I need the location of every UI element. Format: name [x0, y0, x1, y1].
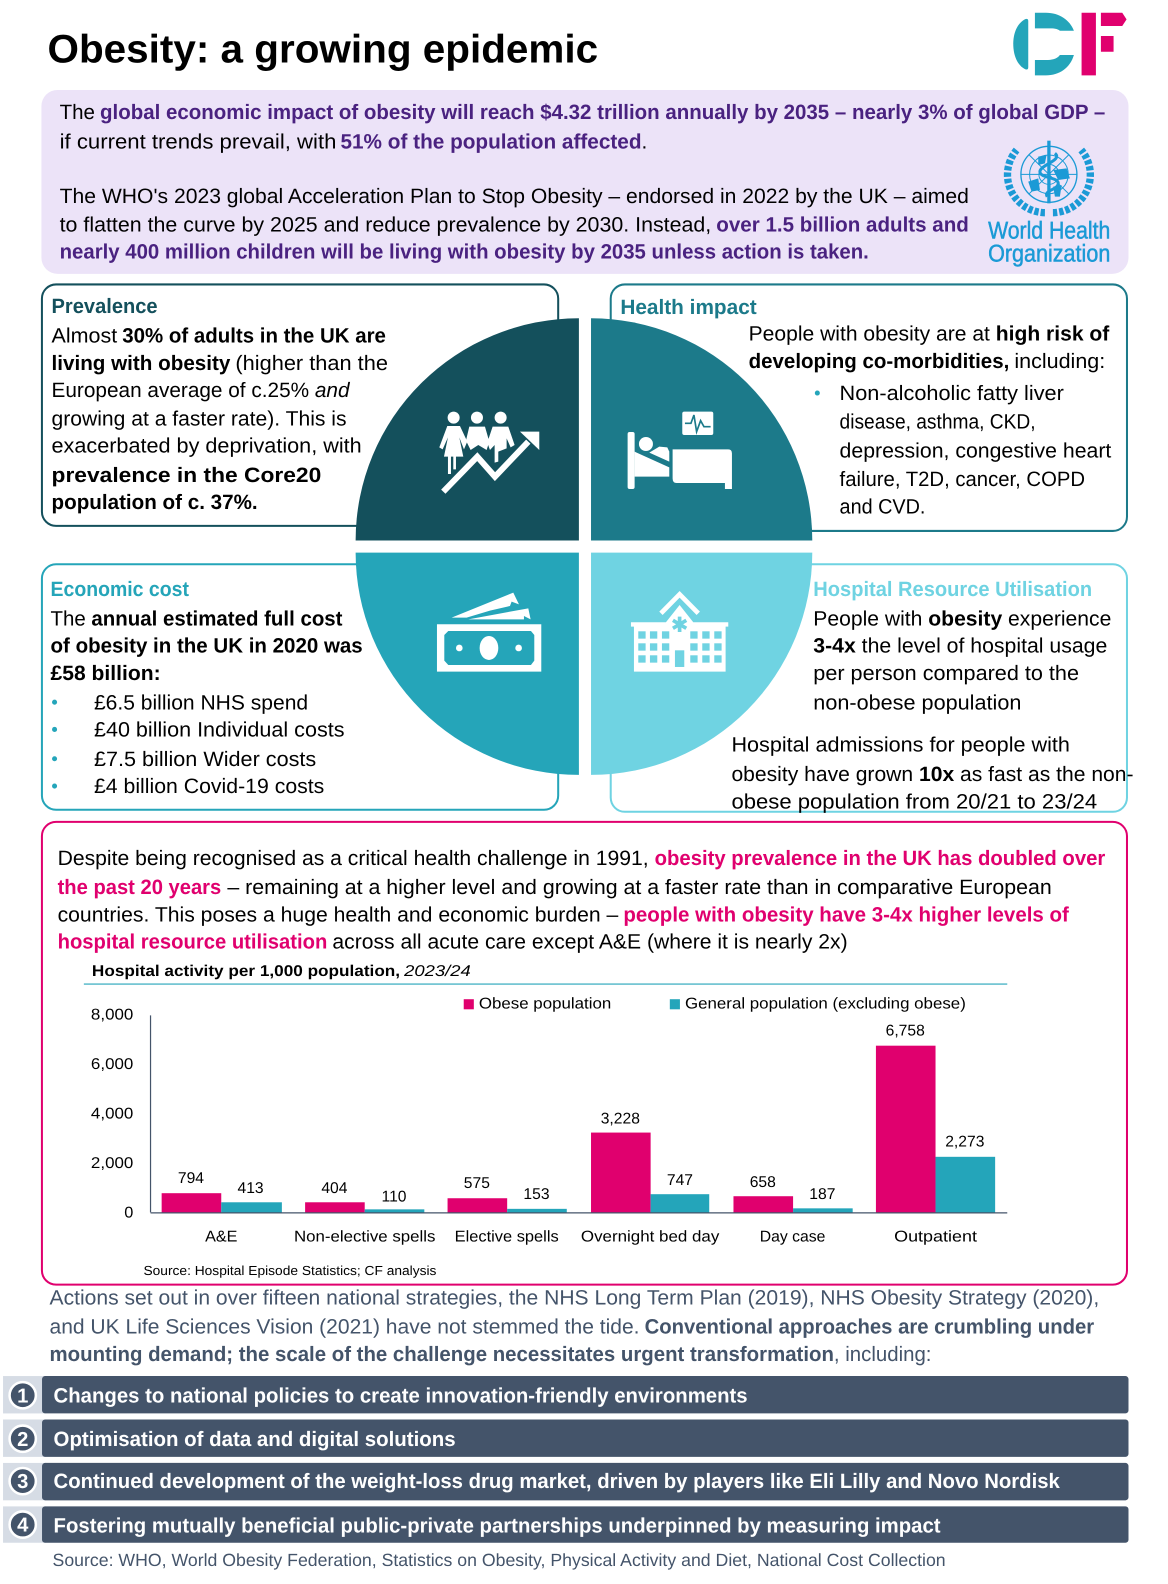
data labels: 413 — [237, 1180, 264, 1197]
data labels — [178, 1022, 984, 1205]
bar chart: hospital activity — [84, 984, 1007, 1246]
action 1: Changes to national policies to create innovation-friendly environments — [54, 1384, 748, 1407]
text block: UK prevalence: across all acute care except A&E (where it is nearly 2x) — [332, 931, 848, 954]
list: cost breakdown: £40 billion Individual costs — [94, 718, 345, 742]
data labels: 153 — [523, 1186, 550, 1203]
text block: WHO plan: nearly 400 million children will be living with obesity by 2035 unless action is taken. — [60, 240, 869, 264]
text block: economic impact: . — [642, 130, 647, 154]
panel: health impact — [611, 284, 1127, 531]
category labels — [205, 1229, 978, 1246]
text block: annual cost: The annual estimated full cost — [51, 607, 343, 630]
action 3: Continued development of the weight-loss drug market, driven by players like Eli Lilly and Novo Nordisk — [54, 1470, 1060, 1493]
quadrant: economic cost with money icon — [356, 553, 579, 775]
quadrant: health impact with bed icon — [591, 318, 812, 541]
data labels: 2,273 — [945, 1134, 984, 1151]
text block: hospital usage: People with obesity experience — [813, 607, 1111, 630]
text block: health risk: developing co-morbidities, — [749, 350, 1009, 373]
text block: hospital admissions — [731, 734, 1134, 813]
data labels: 575 — [464, 1175, 490, 1192]
data labels: 187 — [809, 1186, 835, 1203]
category labels: Outpatient — [894, 1229, 978, 1246]
action 3 — [3, 1463, 1128, 1500]
text block: WHO plan: to flatten the curve by 2025 and reduce prevalence by 2030. Instead, — [60, 213, 711, 236]
action 2: Optimisation of data and digital solutions — [54, 1428, 456, 1451]
icon: banknotes — [437, 593, 541, 672]
source note: Source: WHO, World Obesity Federation, Statistics on Obesity, Physical Activity and Diet, National Cost Collection — [53, 1550, 946, 1570]
action 4: Fostering mutually beneficial public-private partnerships underpinned by measuring impact — [54, 1514, 941, 1538]
heading: hospital resource utilisation: Hospital Resource Utilisation — [813, 578, 1092, 601]
text block: hospital usage: 3-4x the level of hospital usage — [813, 634, 1107, 658]
data labels: 658 — [750, 1174, 776, 1191]
heading: prevalence: Prevalence — [52, 295, 158, 318]
text block: health risk: People with obesity are at high risk of — [749, 322, 1109, 346]
text block: prevalence detail: 30% of adults in the UK are — [122, 324, 386, 348]
text block: actions — [50, 1286, 1099, 1366]
text block: prevalence detail — [52, 324, 388, 514]
text block: hospital admissions: obesity have grown 10x as fast as the non- — [731, 763, 1134, 786]
text block: UK prevalence: hospital resource utilisation — [58, 931, 327, 954]
text block: prevalence detail: Almost — [52, 324, 117, 348]
title: Obesity: a growing epidemic — [47, 27, 598, 72]
text block: UK prevalence — [58, 847, 1105, 954]
heading: health impact: Health impact — [620, 296, 757, 319]
list: co-morbidities: disease, asthma, CKD, — [840, 410, 1036, 433]
text block: actions: and UK Life Sciences Vision (2021) have not stemmed the tide. — [50, 1315, 640, 1339]
data labels: 747 — [667, 1172, 693, 1189]
text block: economic impact: global economic impact of obesity will reach $4.32 trillion annually by 2035 – nearly 3% of global GDP – — [100, 101, 1105, 124]
data labels: 404 — [321, 1180, 348, 1197]
text block: economic impact: 51% of the population affected — [340, 130, 642, 154]
logo: World Health Organization: Organization — [988, 240, 1110, 268]
text block: hospital admissions: Hospital admissions for people with — [731, 734, 1070, 757]
text block: economic impact: if current trends prevail, with — [60, 130, 336, 154]
text block: prevalence detail: living with obesity — [52, 352, 231, 375]
text block: UK prevalence: countries. This poses a huge health and economic burden – — [58, 903, 619, 926]
category labels: Elective spells — [455, 1229, 559, 1246]
text block: hospital usage: non-obese population — [813, 691, 1021, 714]
text block: prevalence detail: (higher than the — [235, 352, 388, 375]
panel: UK prevalence and hospital activity — [42, 822, 1127, 1285]
legend: General population (excluding obese) — [685, 995, 966, 1012]
data labels: 110 — [382, 1188, 407, 1205]
text block: hospital usage: per person compared to the — [813, 662, 1079, 685]
category labels: Non-elective spells — [294, 1229, 436, 1246]
logo: CF — [1013, 13, 1127, 75]
text block: health risk — [749, 322, 1109, 373]
panel: prevalence — [42, 284, 558, 526]
legend — [464, 995, 966, 1012]
text block: WHO plan: The WHO's 2023 global Acceleration Plan to Stop Obesity – endorsed in 2022 by the UK – aimed — [60, 185, 969, 208]
chart source: Source: Hospital Episode Statistics; CF analysis — [143, 1263, 437, 1278]
category labels: Day case — [760, 1229, 825, 1246]
y axis: 6,000 — [91, 1056, 134, 1073]
action 4 — [3, 1506, 1128, 1543]
icon: people and rising arrow — [439, 412, 539, 492]
y axis — [91, 1006, 151, 1221]
chart title: 2023/24 — [403, 963, 471, 980]
text block: UK prevalence: the past 20 years — [58, 876, 221, 899]
list: co-morbidities — [815, 382, 1112, 518]
text block: UK prevalence: people with obesity have 3-4x higher levels of — [623, 903, 1069, 926]
action 2 — [3, 1419, 1128, 1457]
y axis: 2,000 — [91, 1155, 134, 1172]
category labels: Overnight bed day — [581, 1229, 720, 1246]
quadrant: prevalence with people icon — [356, 318, 579, 541]
action 2: 2 — [17, 1429, 28, 1451]
icon: hospital bed and monitor — [628, 412, 732, 489]
text block: prevalence detail: growing at a faster rate). This is — [52, 407, 347, 430]
panel: economic cost — [42, 564, 558, 810]
text block: annual cost: of obesity in the UK in 2020 was — [51, 634, 363, 658]
y axis: 8,000 — [91, 1006, 134, 1023]
text block: WHO plan: over 1.5 billion adults and — [716, 213, 969, 236]
panel: global impact summary — [41, 90, 1128, 274]
bars: general population — [221, 1157, 995, 1213]
data labels: 6,758 — [886, 1022, 925, 1040]
text block: WHO plan — [60, 185, 969, 264]
y axis: 4,000 — [91, 1105, 134, 1122]
action 1: 1 — [17, 1385, 28, 1407]
list: cost breakdown: £7.5 billion Wider costs — [94, 748, 316, 771]
panel: hospital resource utilisation — [611, 564, 1127, 812]
action 3: 3 — [17, 1471, 28, 1493]
text block: economic impact — [60, 101, 1105, 154]
list: co-morbidities: depression, congestive heart — [840, 440, 1112, 463]
text block: actions: Conventional approaches are crumbling under — [645, 1315, 1094, 1339]
quadrant: hospital resource with building icon — [591, 553, 812, 775]
list: cost breakdown: £4 billion Covid-19 costs — [94, 775, 324, 798]
text block: prevalence detail: prevalence in the Core20 — [52, 464, 321, 487]
text block: annual cost — [51, 607, 363, 685]
text block: hospital admissions: obese population from 20/21 to 23/24 — [731, 790, 1097, 813]
legend: Obese population — [479, 995, 611, 1012]
heading: economic cost: Economic cost — [51, 578, 189, 601]
text block: UK prevalence: Despite being recognised as a critical health challenge in 1991, — [58, 847, 649, 870]
logo: World Health Organization: World Health — [988, 217, 1110, 245]
text block: UK prevalence: – remaining at a higher level and growing at a faster rate than in comparative European — [227, 876, 1052, 899]
data labels: 794 — [178, 1170, 204, 1187]
text block: prevalence detail: exacerbated by deprivation, with — [52, 434, 362, 458]
bars: obese population — [162, 1046, 936, 1213]
data labels: 3,228 — [601, 1110, 640, 1128]
text block: hospital usage — [813, 607, 1111, 714]
text block: prevalence detail: population of c. 37%. — [52, 491, 258, 514]
action 4: 4 — [17, 1514, 29, 1537]
list: co-morbidities: Non-alcoholic fatty liver — [840, 382, 1064, 405]
logo: World Health Organization — [988, 141, 1110, 268]
y axis: 0 — [124, 1204, 134, 1221]
text block: UK prevalence: obesity prevalence in the UK has doubled over — [655, 847, 1105, 870]
list: cost breakdown: £6.5 billion NHS spend — [94, 691, 308, 714]
list: co-morbidities: and CVD. — [840, 495, 925, 518]
action 1 — [3, 1376, 1128, 1413]
list: cost breakdown — [52, 691, 345, 798]
text block: actions: Actions set out in over fifteen national strategies, the NHS Long Term Plan (2019), NHS Obesity Strategy (2020), — [50, 1286, 1099, 1309]
list: co-morbidities: failure, T2D, cancer, COPD — [840, 468, 1085, 491]
text block: economic impact: The — [60, 101, 95, 124]
text block: health risk: including: — [1014, 350, 1105, 373]
text block: prevalence detail: European average of c.25% and — [52, 379, 350, 402]
icon: hospital building — [631, 594, 728, 672]
chart title: Hospital activity per 1,000 population, — [92, 963, 400, 980]
text block: annual cost: £58 billion: — [51, 662, 161, 685]
text block: actions: mounting demand; the scale of the challenge necessitates urgent transformation, including: — [50, 1343, 931, 1366]
category labels: A&E — [205, 1229, 237, 1246]
